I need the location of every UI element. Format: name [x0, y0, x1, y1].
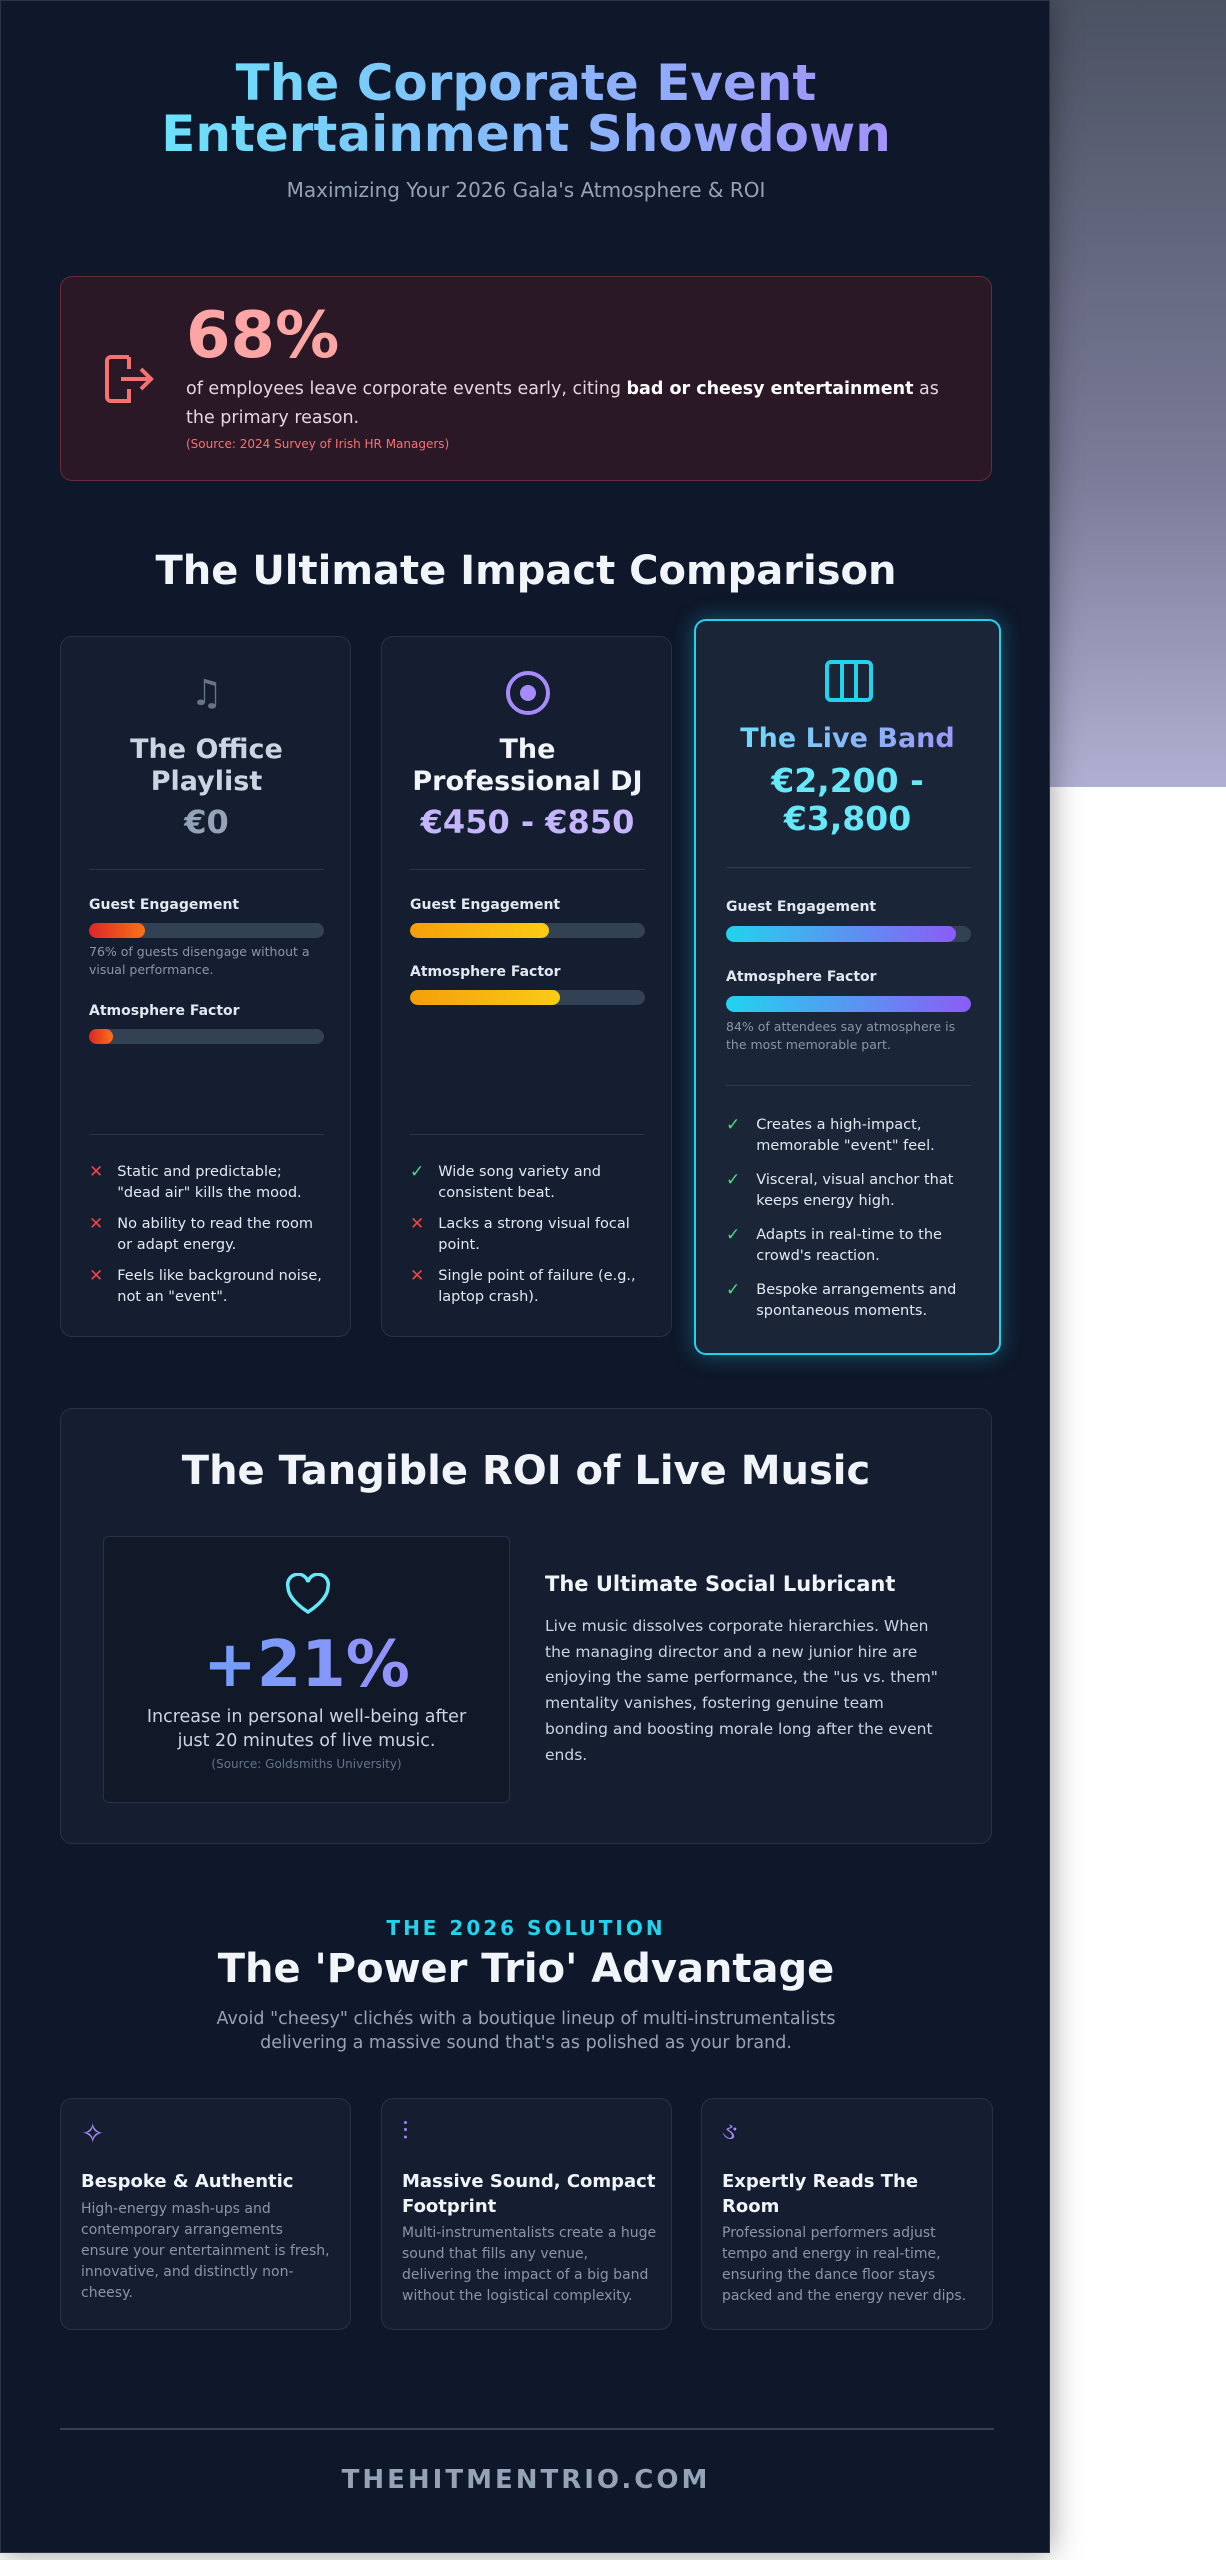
feature text: High-energy mash-ups and contemporary arrangements ensure your entertainment is fresh, innovative, and distinctly non-cheesy.: [81, 2201, 330, 2301]
cons list: Static and predictable; "dead air" kills the mood.: [117, 1164, 302, 1201]
feature: massive sound: [381, 2098, 672, 2330]
icon: record: [506, 671, 550, 715]
title: [1, 58, 1051, 160]
metric: engagement: [89, 897, 324, 977]
icon: sparkles: ✧: [81, 2117, 104, 2150]
feature title: Massive Sound, Compact Footprint: [402, 2171, 655, 2217]
stat callout: 68%: [60, 276, 992, 481]
panel: live band: [694, 619, 1001, 1355]
metric: atmosphere: [410, 964, 645, 1005]
metric: atmosphere: Atmosphere Factor: [726, 969, 877, 985]
stat number: 68%: [186, 299, 339, 373]
panel: office playlist: [60, 636, 351, 1337]
icon: heart: [286, 1573, 330, 1614]
icon: note: ♫: [190, 673, 223, 714]
text block: social lubricant: Live music dissolves corporate hierarchies. When the managing director and a new junior hire are enjoying the same performance, the "us vs. them" mentality vanishes, fostering genuine team bonding and boosting morale long after the event ends.: [545, 1617, 938, 1764]
price: €450 - €850: [421, 803, 634, 841]
subtitle: [216, 2009, 835, 2053]
heading: comparison: The Ultimate Impact Comparison: [156, 548, 896, 594]
pros/cons list: Wide song variety and consistent beat.: [438, 1164, 601, 1201]
feature: reads room: [701, 2098, 993, 2330]
metric: atmosphere: 84% of attendees say atmosphere is the most memorable part.: [726, 1019, 955, 1052]
subtitle: delivering a massive sound that's as polished as your brand.: [260, 2033, 792, 2053]
subtitle: Avoid "cheesy" clichés with a boutique lineup of multi-instrumentalists: [217, 2009, 835, 2029]
text block: social lubricant: The Ultimate Social Lubricant: [545, 1572, 895, 1596]
title: The Corporate Event: [236, 54, 816, 112]
card title: [412, 734, 643, 797]
icon: ear: ઙ: [722, 2117, 737, 2145]
icon: sliders: ⫶: [402, 2117, 408, 2147]
cons list: ✕: [89, 1162, 103, 1182]
card title: Playlist: [151, 766, 262, 797]
panel: professional DJ: [381, 636, 672, 1337]
metric: engagement: Guest Engagement: [726, 899, 876, 915]
metric: atmosphere: Atmosphere Factor: [89, 1003, 240, 1019]
pros list: Bespoke arrangements and spontaneous moments.: [756, 1282, 956, 1319]
card title: The Office: [130, 734, 283, 765]
price: [770, 761, 924, 838]
cons list: [89, 1162, 322, 1305]
cons list: No ability to read the room or adapt energy.: [117, 1216, 313, 1253]
pros list: ✓: [726, 1225, 740, 1245]
metric: atmosphere: [89, 1003, 324, 1044]
cons list: ✕: [89, 1266, 103, 1286]
pros/cons list: ✕: [410, 1214, 424, 1234]
pros/cons list: Single point of failure (e.g., laptop crash).: [438, 1268, 636, 1305]
metric: atmosphere: [726, 969, 971, 1052]
pros list: [726, 1115, 956, 1319]
stat number: +21%: [203, 1628, 410, 1702]
metric: engagement: [726, 899, 971, 942]
cons list: ✕: [89, 1214, 103, 1234]
metric: engagement: Guest Engagement: [89, 897, 239, 913]
metric: engagement: [410, 897, 645, 938]
pros list: ✓: [726, 1170, 740, 1190]
footer: THEHITMENTRIO.COM: [342, 2465, 710, 2495]
stat text: of employees leave corporate events early, citing bad or cheesy entertainment as the primary reason.: [186, 379, 939, 428]
card title: Professional DJ: [412, 766, 643, 797]
cons list: Feels like background noise, not an "event".: [117, 1268, 322, 1305]
feature text: Multi-instrumentalists create a huge sound that fills any venue, delivering the impact of a big band without the logistical complexity.: [402, 2225, 656, 2304]
stat number: [104, 1627, 509, 1703]
feature: bespoke: [60, 2098, 351, 2330]
metric: engagement: 76% of guests disengage without a visual performance.: [89, 944, 310, 977]
metric: atmosphere: Atmosphere Factor: [410, 964, 561, 980]
heading: power trio: The 'Power Trio' Advantage: [218, 1946, 834, 1992]
stat text: Increase in personal well-being after just 20 minutes of live music.: [147, 1707, 466, 1751]
subtitle: Maximizing Your 2026 Gala's Atmosphere & ROI: [287, 178, 765, 202]
price: €2,200 -: [771, 761, 924, 800]
eyebrow: THE 2026 SOLUTION: [386, 1916, 666, 1940]
feature title: Expertly Reads The Room: [722, 2171, 918, 2217]
pros list: ✓: [726, 1115, 740, 1135]
card title: The Live Band: [740, 723, 955, 754]
pros list: Creates a high-impact, memorable "event" feel.: [756, 1117, 935, 1154]
feature title: Bespoke & Authentic: [81, 2171, 293, 2192]
pros/cons list: ✓: [410, 1162, 424, 1182]
card title: [130, 734, 283, 797]
pros/cons list: ✕: [410, 1266, 424, 1286]
card title: The: [500, 734, 555, 765]
pros/cons list: Lacks a strong visual focal point.: [438, 1216, 630, 1253]
price: €3,800: [784, 799, 911, 838]
panel: ROI: [60, 1408, 992, 1844]
icon: exit: [105, 355, 154, 403]
icon: band columns: [825, 660, 873, 702]
metric: engagement: Guest Engagement: [410, 897, 560, 913]
title: Entertainment Showdown: [161, 105, 891, 163]
pros/cons list: [410, 1162, 636, 1305]
pros list: Adapts in real-time to the crowd's reaction.: [756, 1227, 942, 1264]
pros list: ✓: [726, 1280, 740, 1300]
source: (Source: Goldsmiths University): [211, 1757, 402, 1771]
source: (Source: 2024 Survey of Irish HR Managers): [186, 437, 449, 451]
feature text: Professional performers adjust tempo and energy in real-time, ensuring the dance floor stays packed and the energy never dips.: [722, 2225, 966, 2304]
price: €0: [184, 803, 229, 841]
heading: ROI: The Tangible ROI of Live Music: [182, 1448, 870, 1494]
pros list: Visceral, visual anchor that keeps energy high.: [756, 1172, 953, 1209]
stat box: +21%: [103, 1536, 510, 1803]
